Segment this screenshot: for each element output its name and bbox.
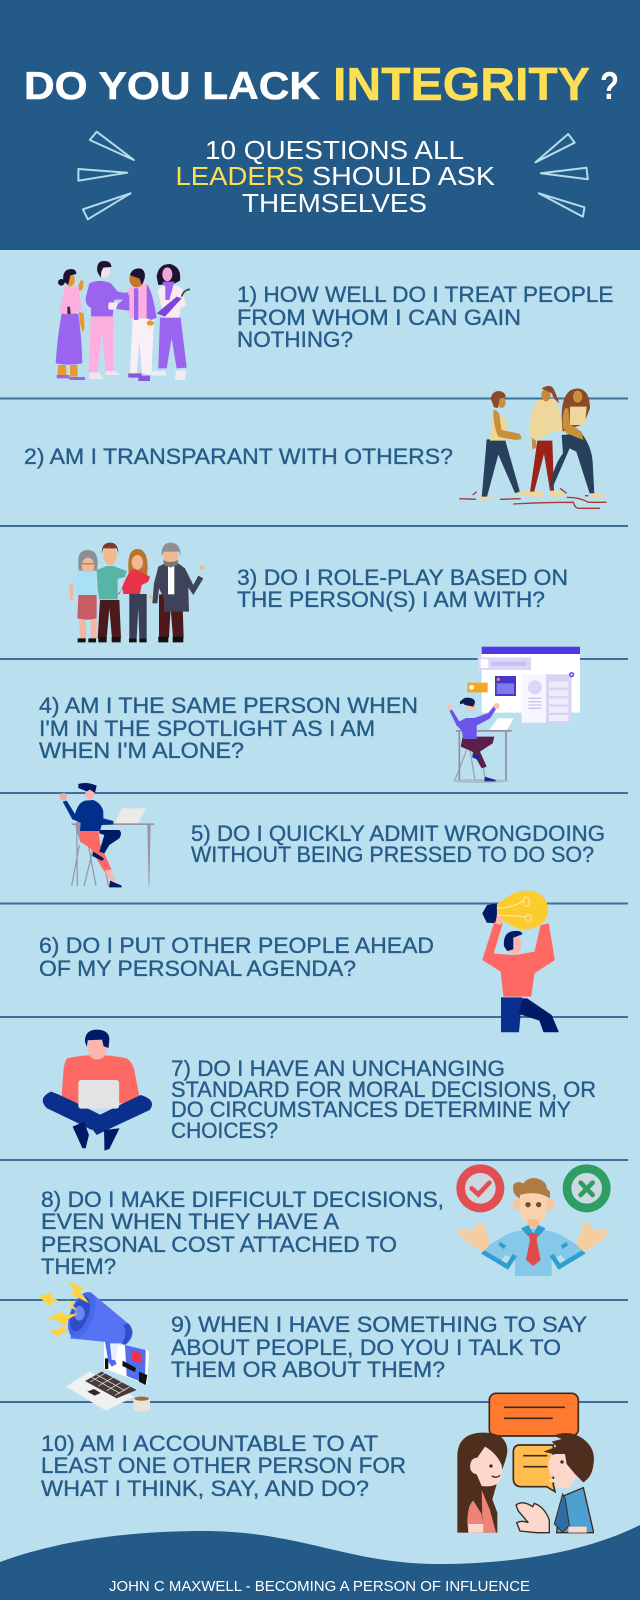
- illustration: woman working at laptop: [60, 783, 154, 887]
- illustration: two people talking with speech bubbles: [457, 1393, 594, 1533]
- illustration: three women walking: [459, 386, 607, 508]
- question 10: WHAT I THINK, SAY, AND DO?: [41, 1476, 369, 1501]
- question 9: 9) WHEN I HAVE SOMETHING TO SAY: [171, 1312, 587, 1337]
- question 5: WITHOUT BEING PRESSED TO DO SO?: [191, 842, 594, 867]
- question 8: EVEN WHEN THEY HAVE A: [41, 1209, 339, 1234]
- subtitle: SHOULD ASK: [312, 161, 496, 191]
- question 6: [39, 933, 434, 981]
- question 3: 3) DO I ROLE-PLAY BASED ON: [237, 565, 568, 590]
- illustration: family of four: [69, 543, 204, 642]
- illustration: four people talking: [56, 261, 190, 381]
- question 4: 4) AM I THE SAME PERSON WHEN: [39, 693, 418, 718]
- question 5: 5) DO I QUICKLY ADMIT WRONGDOING: [191, 821, 605, 846]
- subtitle: THEMSELVES: [242, 188, 427, 218]
- icon: left burst rays: [78, 132, 134, 219]
- question 10: LEAST ONE OTHER PERSON FOR: [41, 1453, 406, 1478]
- subtitle: [176, 135, 496, 218]
- question 4: I'M IN THE SPOTLIGHT AS I AM: [39, 716, 375, 741]
- title: INTEGRITY: [333, 58, 590, 110]
- question 1: [237, 282, 614, 352]
- header panel: [0, 0, 640, 250]
- subtitle: 10 QUESTIONS ALL: [205, 135, 464, 165]
- question 5: [191, 821, 605, 867]
- question 1: NOTHING?: [237, 327, 353, 352]
- question 8: THEM?: [41, 1254, 116, 1279]
- question 1: FROM WHOM I CAN GAIN: [237, 305, 521, 330]
- footer wave: [0, 1525, 640, 1600]
- icon: right burst rays: [536, 134, 588, 217]
- question 6: OF MY PERSONAL AGENDA?: [39, 956, 356, 981]
- question 8: [41, 1187, 444, 1279]
- question 8: PERSONAL COST ATTACHED TO: [41, 1232, 397, 1257]
- question 7: DO CIRCUMSTANCES DETERMINE MY: [171, 1097, 571, 1122]
- question 10: 10) AM I ACCOUNTABLE TO AT: [41, 1431, 378, 1456]
- question 9: [171, 1312, 587, 1382]
- title: ?: [600, 65, 619, 108]
- question 7: CHOICES?: [171, 1118, 278, 1143]
- question 10: [41, 1431, 406, 1501]
- question 7: STANDARD FOR MORAL DECISIONS, OR: [171, 1077, 596, 1102]
- title: DO YOU LACK: [24, 65, 320, 108]
- footer credit: JOHN C MAXWELL - BECOMING A PERSON OF INFLUENCE: [109, 1579, 530, 1595]
- question 8: 8) DO I MAKE DIFFICULT DECISIONS,: [41, 1187, 444, 1212]
- subtitle: LEADERS: [176, 161, 304, 191]
- question 4: [39, 693, 418, 763]
- question 6: 6) DO I PUT OTHER PEOPLE AHEAD: [39, 933, 434, 958]
- illustration: man lifting light bulb: [482, 891, 559, 1032]
- question 4: WHEN I'M ALONE?: [39, 738, 244, 763]
- question 9: ABOUT PEOPLE, DO YOU I TALK TO: [171, 1335, 561, 1360]
- question 1: 1) HOW WELL DO I TREAT PEOPLE: [237, 282, 614, 307]
- illustration: man sitting cross-legged with laptop: [43, 1030, 152, 1151]
- illustration: megaphone and laptop: [38, 1281, 150, 1412]
- title: [24, 58, 619, 110]
- illustration: man weighing check and cross: [456, 1164, 611, 1276]
- question 3: THE PERSON(S) I AM WITH?: [237, 587, 545, 612]
- question 2: 2) AM I TRANSPARANT WITH OTHERS?: [24, 444, 453, 469]
- question 7: [171, 1056, 596, 1143]
- question 7: 7) DO I HAVE AN UNCHANGING: [171, 1056, 505, 1081]
- question 9: THEM OR ABOUT THEM?: [171, 1357, 445, 1382]
- question 3: [237, 565, 568, 612]
- illustration: person at desk with dashboard: [446, 647, 580, 783]
